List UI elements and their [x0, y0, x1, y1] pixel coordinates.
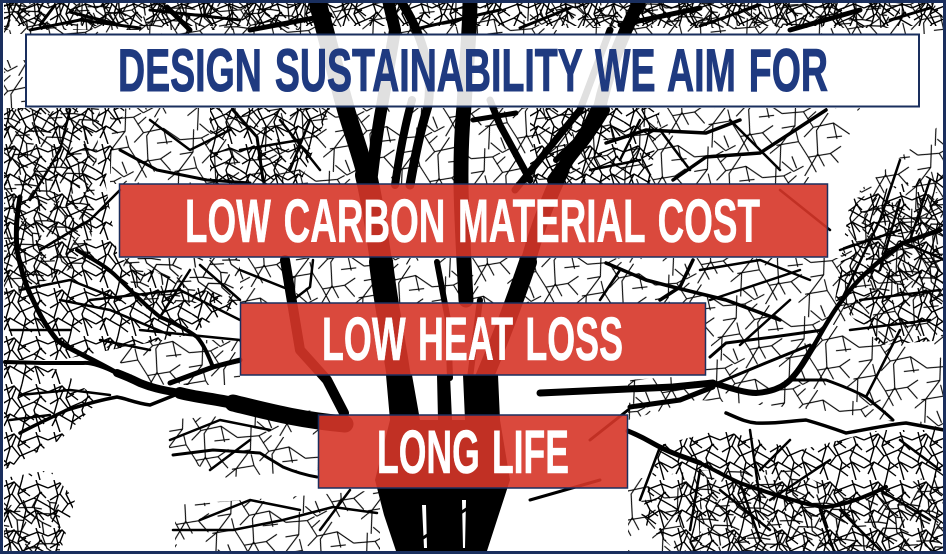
panel: low heat loss	[240, 303, 706, 375]
panel: long life	[318, 415, 628, 488]
label: low heat loss: LOW HEAT LOSS	[322, 305, 623, 373]
trunk	[375, 375, 510, 554]
large left limb	[5, 110, 377, 530]
upper branches	[30, 5, 930, 180]
large right limb	[420, 110, 945, 554]
label: long life: LONG LIFE	[377, 418, 569, 486]
panel: title banner	[26, 34, 919, 106]
main stems rising through the crown	[285, 0, 640, 413]
panel: low carbon material cost	[120, 184, 828, 257]
